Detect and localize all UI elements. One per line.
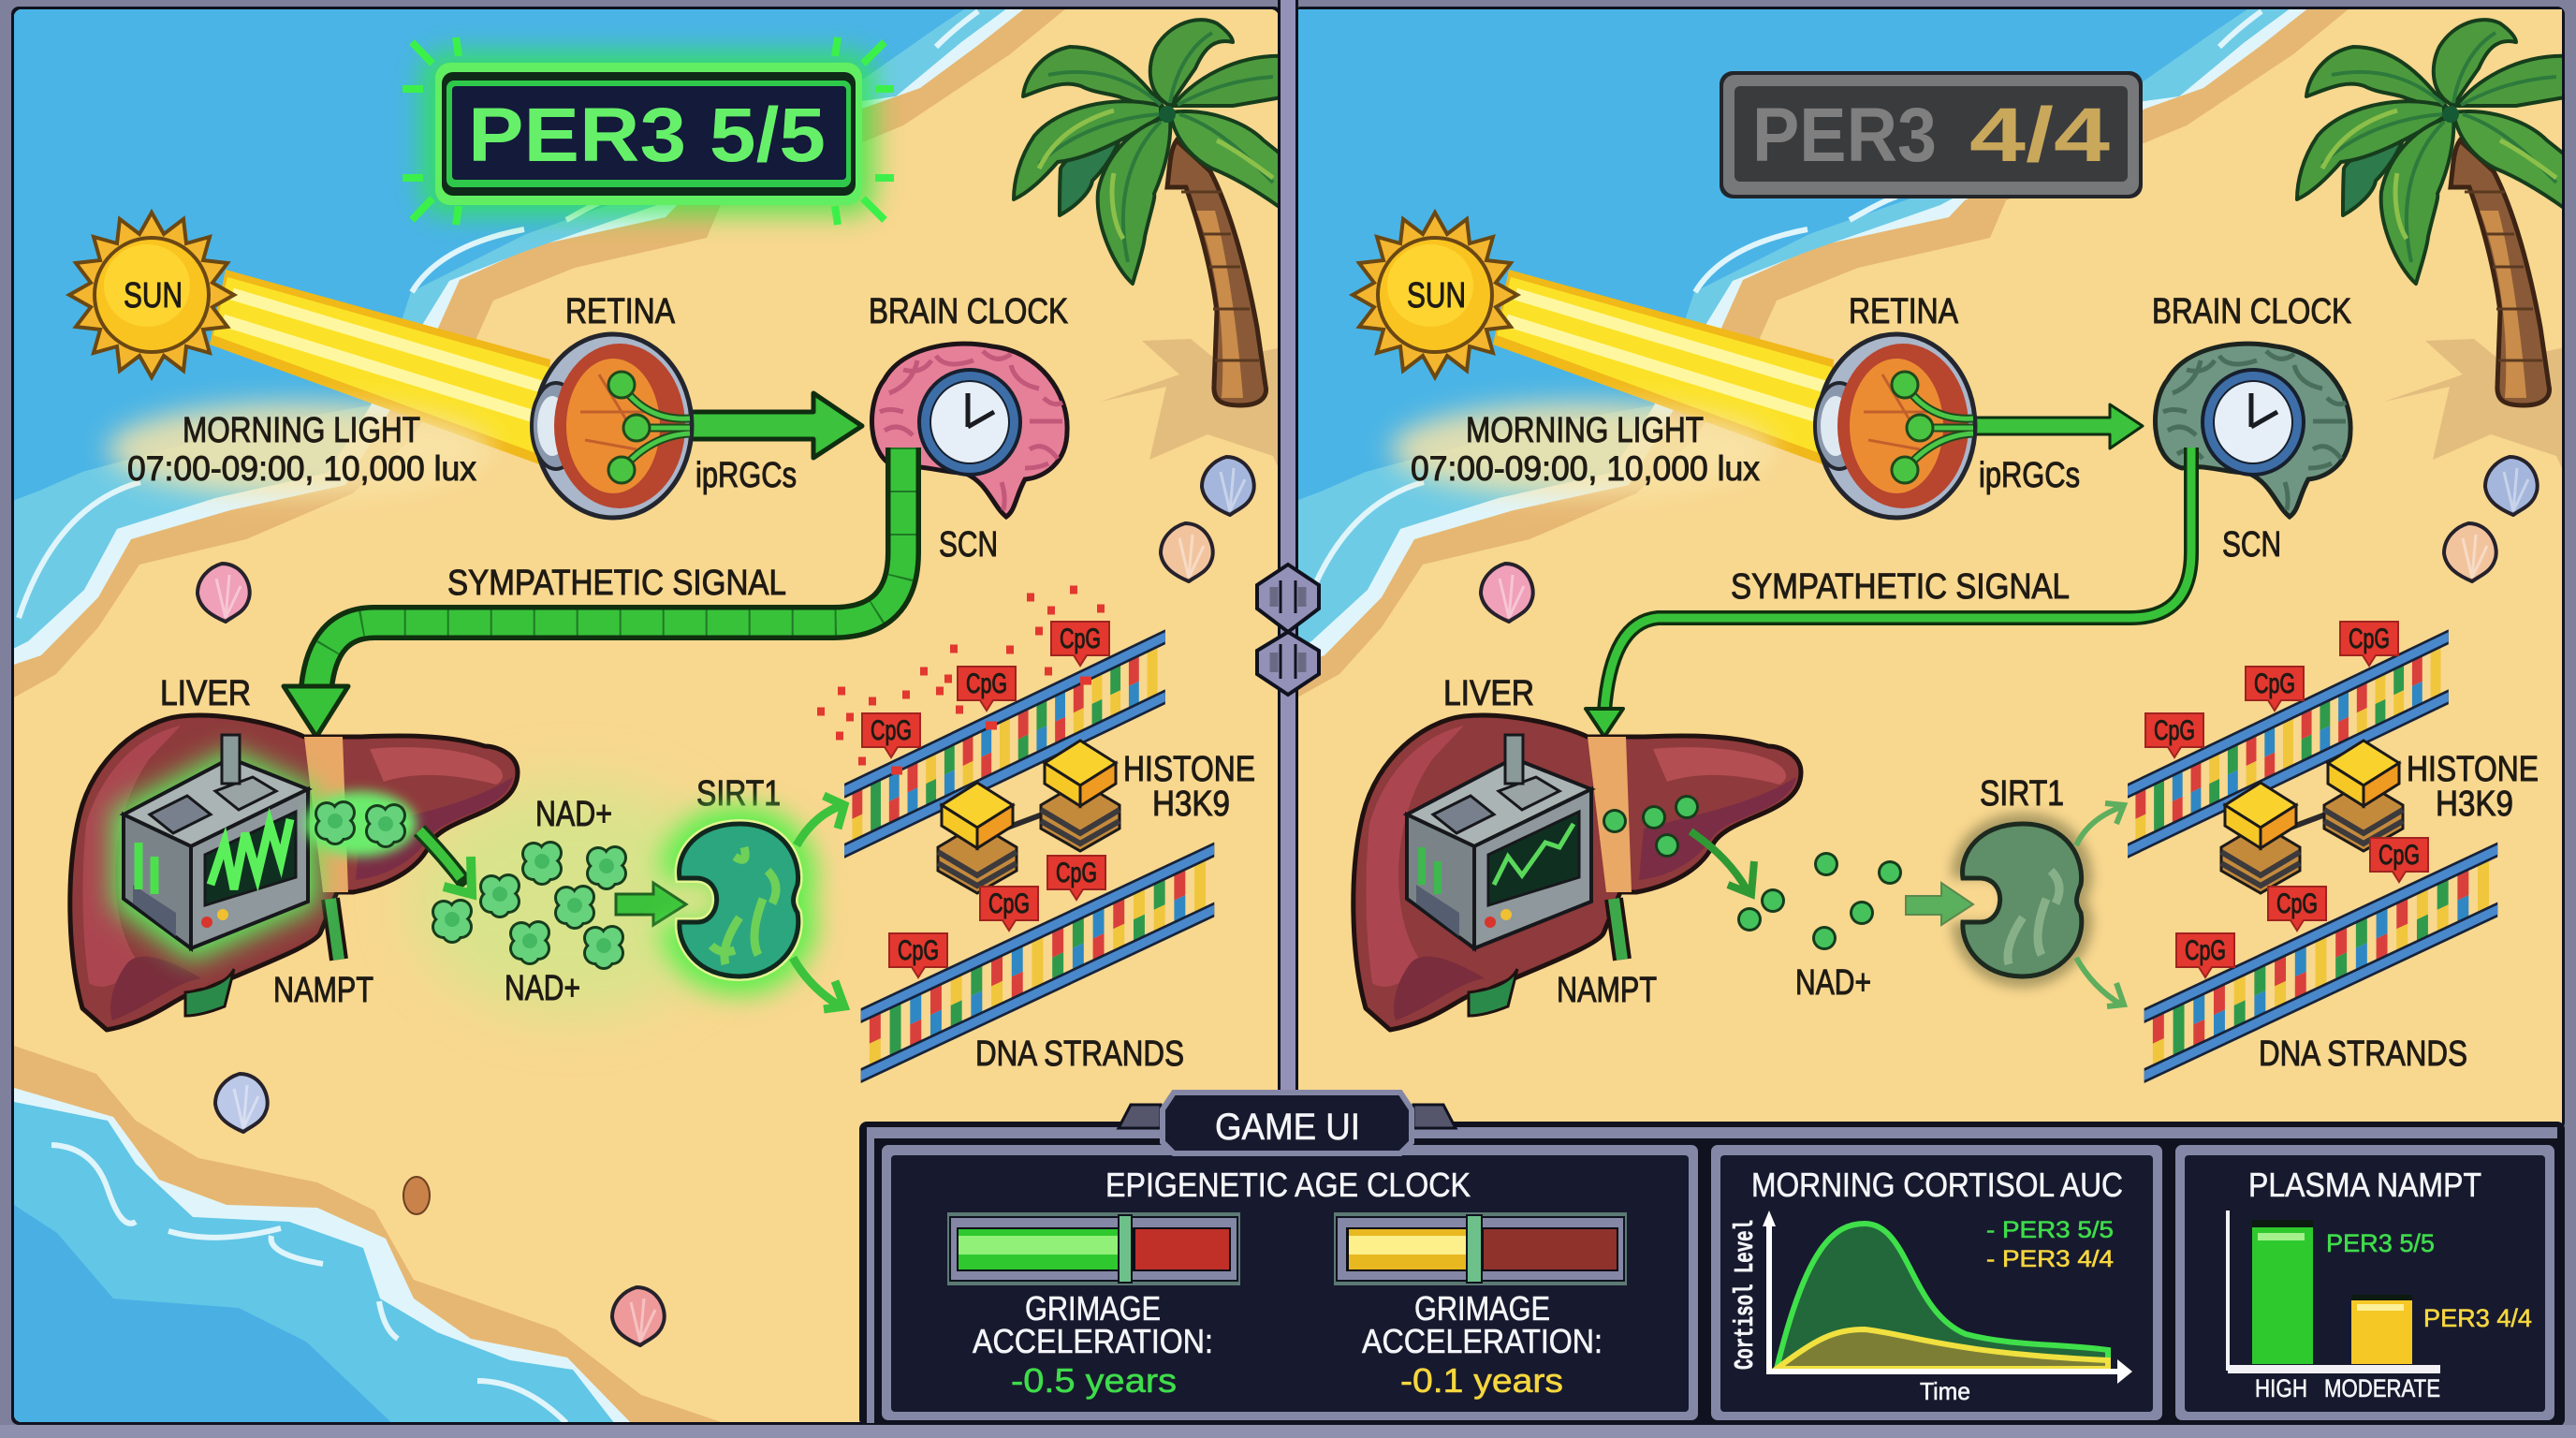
CpG tags: CpG: [1060, 624, 1101, 654]
label: histone H3K9: HISTONE: [1123, 750, 1255, 789]
CpG tags: CpG: [898, 935, 939, 966]
grimage PER3 4/4: GRIMAGE: [1414, 1289, 1550, 1328]
line chart: [1730, 1211, 2132, 1405]
arrow: SIRT1 to histone: [797, 796, 844, 845]
CpG tags: CpG: [871, 715, 912, 746]
CpG tags: CpG: [2378, 840, 2420, 871]
arrow: NAD+ to SIRT1: [616, 883, 686, 925]
CpG tags: CpG: [966, 668, 1007, 699]
bar chart: HIGH: [2255, 1374, 2307, 1402]
label: histone H3K9: H3K9: [2436, 785, 2513, 824]
morning light text: MORNING LIGHT: [1466, 411, 1704, 450]
label: histone H3K9: [2407, 750, 2539, 824]
icon: NAD+ molecules: [304, 791, 627, 970]
icon: NAD+ dots: [1603, 795, 1902, 950]
label: brain clock: BRAIN CLOCK: [2152, 292, 2351, 331]
arrow: NAD+ to SIRT1: [1906, 883, 1973, 925]
morning light text: 07:00-09:00, 10,000 lux: [1411, 449, 1760, 488]
lower-left bay: [0, 1046, 738, 1428]
CpG tags: CpG: [2254, 668, 2295, 699]
label: histone H3K9: H3K9: [1152, 785, 1230, 824]
label: DNA strands: DNA STRANDS: [975, 1034, 1184, 1074]
CpG tags: CpG: [2349, 624, 2390, 654]
label: SIRT1: SIRT1: [1980, 774, 2064, 814]
line chart: - PER3 4/4: [1986, 1246, 2114, 1272]
panel: PER3 5/5 beach scene: [0, 0, 1310, 1438]
CpG tags: CpG: [2276, 888, 2318, 919]
line chart: - PER3 5/5: [1986, 1217, 2114, 1243]
tab: GAME UI: [1163, 1093, 1412, 1153]
morning light text: [127, 411, 476, 488]
badge: PER3 5/5: PER3 5/5: [468, 93, 826, 178]
morning light text: 07:00-09:00, 10,000 lux: [127, 449, 476, 488]
badge: PER3 5/5: [402, 37, 894, 225]
bar chart: PER3 5/5: [2326, 1229, 2435, 1257]
badge: PER3 4/4: [1720, 71, 2143, 198]
label: sun: SUN: [124, 276, 183, 315]
icon: dim machine: [1407, 735, 1591, 948]
icon: SIRT1 glowing: [661, 805, 817, 995]
label glow: [1391, 403, 1775, 496]
icon: histones: [2221, 741, 2403, 893]
arrow: thin sympathetic signal: [1586, 448, 2191, 737]
arrow: SIRT1 to DNA: [793, 958, 844, 1009]
tab: GAME UI: GAME UI: [1215, 1107, 1360, 1148]
grimage PER3 4/4: -0.1 years: [1400, 1361, 1563, 1400]
heading: PLASMA NAMPT: [2248, 1166, 2481, 1204]
CpG tags: CpG: [2185, 935, 2226, 966]
haze: NAD glow: [412, 782, 730, 1016]
icon: sun: [69, 213, 234, 377]
label: iprgcs: ipRGCs: [695, 456, 797, 495]
label: iprgcs: ipRGCs: [1979, 456, 2080, 495]
icon: dim brain with clock: [2155, 344, 2350, 517]
arrow: liver to NAD+: [1690, 831, 1754, 894]
methylation splatter: [817, 590, 1105, 770]
sub-panel: epigenetic age clock: [881, 1144, 1699, 1421]
arrow: liver to NAD+: [419, 830, 466, 885]
arrow: retina to brain: [683, 393, 862, 458]
label: NAMPT: NAMPT: [273, 971, 373, 1010]
grimage PER3 5/5: ACCELERATION:: [973, 1322, 1213, 1360]
label: histone H3K9: [1123, 750, 1255, 824]
line chart: Time: [1920, 1377, 1970, 1405]
shells: [198, 457, 1254, 1345]
icon: eye: [1815, 334, 1975, 518]
label: SIRT1: SIRT1: [696, 774, 781, 814]
icon: liver: [1354, 715, 1801, 1030]
grimage PER3 4/4: [1362, 1289, 1603, 1400]
CpG tags: CpG: [988, 888, 1030, 919]
icon: DNA strand lower: [861, 850, 1214, 1076]
CpG tags: [862, 622, 1109, 977]
label: NAD+: NAD+: [1795, 963, 1871, 1003]
arrow: retina to brain: [1967, 404, 2143, 448]
label glow: [108, 403, 491, 496]
morning light text: MORNING LIGHT: [183, 411, 420, 450]
icon: eye: [532, 334, 692, 518]
CpG tags: [2145, 622, 2428, 977]
sub-panel: morning cortisol AUC: [1710, 1144, 2163, 1421]
label: scn: SCN: [2222, 525, 2281, 565]
CpG tags: CpG: [1056, 858, 1097, 888]
arrow head: [419, 830, 472, 894]
label: NAD+ lower: NAD+: [505, 969, 580, 1008]
label: DNA strands: DNA STRANDS: [2259, 1034, 2467, 1074]
icon: DNA strand lower: [2144, 850, 2497, 1076]
grimage PER3 5/5: -0.5 years: [1011, 1361, 1177, 1400]
label: liver: LIVER: [160, 674, 251, 713]
CpG tags: CpG: [2154, 715, 2195, 746]
gauge: PER3 5/5: [947, 1212, 1240, 1285]
badge: PER3 4/4: PER3: [1752, 93, 1937, 178]
morning light text: [1411, 411, 1760, 488]
divider ornament: [1257, 0, 1319, 1133]
label: retina: RETINA: [565, 292, 676, 331]
icon: glowing machine: [112, 735, 318, 962]
label: retina: RETINA: [1849, 292, 1959, 331]
light-beam: [1493, 270, 1834, 465]
label: histone H3K9: HISTONE: [2407, 750, 2539, 789]
label: sympathetic signal: SYMPATHETIC SIGNAL: [1731, 567, 2070, 607]
label: sun: SUN: [1407, 276, 1466, 315]
label: NAD+ upper: NAD+: [535, 795, 612, 834]
arrow: SIRT1 to DNA: [2076, 958, 2124, 1006]
icon: DNA strand upper: [844, 637, 1165, 851]
sub-panel: plasma NAMPT: [2174, 1144, 2555, 1421]
grimage PER3 5/5: [973, 1289, 1213, 1400]
bar chart: PER3 4/4: [2423, 1304, 2532, 1332]
light-beam: [210, 270, 550, 465]
icon: histones: [938, 741, 1120, 893]
label: brain clock: BRAIN CLOCK: [869, 292, 1068, 331]
icon: brain with clock: [871, 344, 1067, 517]
icon: DNA strand upper: [2128, 637, 2449, 851]
label: scn: SCN: [939, 525, 998, 565]
icon: liver: [70, 715, 518, 1030]
panel: PER3 4/4 beach scene: [1283, 0, 2576, 1217]
heading: MORNING CORTISOL AUC: [1751, 1166, 2123, 1204]
icon: sun: [1353, 213, 1517, 377]
line chart: Cortisol Level: [1730, 1220, 1761, 1370]
bar chart: [2228, 1211, 2532, 1402]
grimage PER3 4/4: ACCELERATION:: [1362, 1322, 1603, 1360]
shells: [1481, 457, 2538, 622]
heading: EPIGENETIC AGE CLOCK: [1105, 1166, 1471, 1204]
arrow: SIRT1 to histone: [2076, 803, 2124, 845]
label: sympathetic signal: SYMPATHETIC SIGNAL: [447, 564, 786, 603]
panel: game UI: [0, 1093, 2576, 1438]
badge: PER3 4/4: 4/4: [1969, 93, 2111, 178]
bar chart: MODERATE: [2324, 1374, 2440, 1402]
label: NAMPT: NAMPT: [1557, 971, 1657, 1010]
icon: SIRT1 dim: [1952, 813, 2093, 988]
grimage PER3 5/5: GRIMAGE: [1025, 1289, 1161, 1328]
gauge: PER3 4/4: [1334, 1212, 1627, 1285]
arrow: sympathetic signal pipe: [284, 448, 903, 737]
palm tree: [1014, 20, 1287, 405]
label: liver: LIVER: [1443, 674, 1534, 713]
